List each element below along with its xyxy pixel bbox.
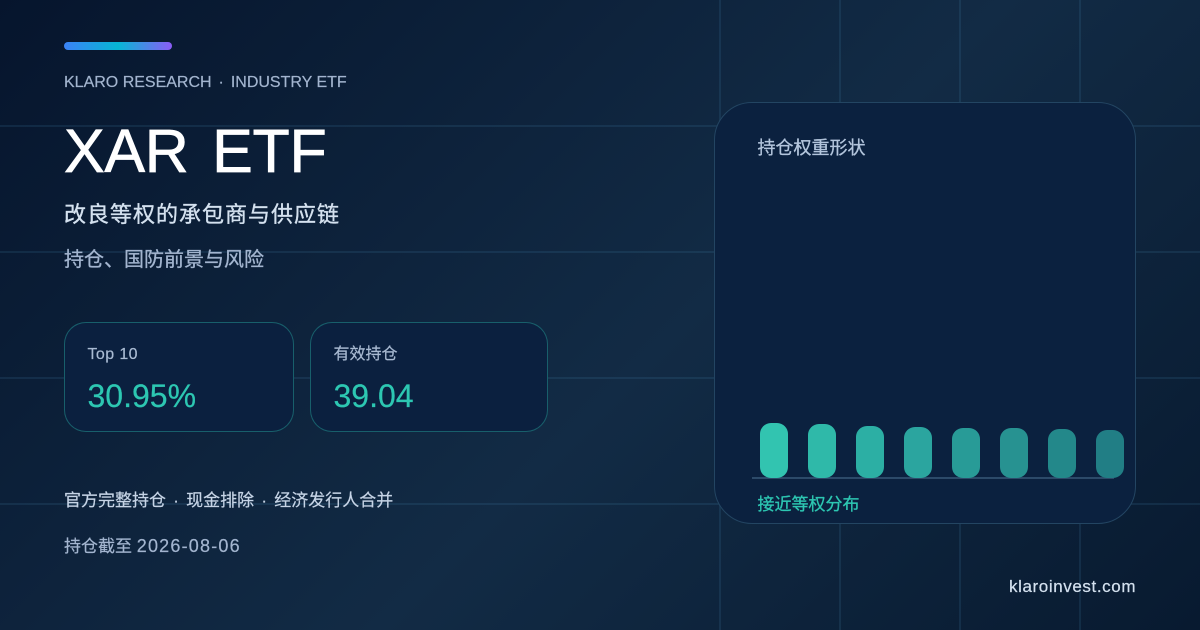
- stat card: effective holdings: [310, 322, 548, 432]
- title: XAR ETF: [64, 117, 326, 185]
- baseline: [752, 477, 1114, 479]
- chart caption: 接近等权分布: [758, 494, 860, 514]
- accent bar: [64, 42, 172, 50]
- bar chart: [752, 423, 1124, 479]
- subtitle: 改良等权的承包商与供应链: [64, 202, 340, 227]
- site url: klaroinvest.com: [1009, 577, 1136, 596]
- stat label: 有效持仓: [334, 346, 398, 363]
- panel: holdings weight shape: [714, 102, 1136, 524]
- stat label: Top 10: [88, 346, 138, 363]
- stat value: 39.04: [334, 378, 414, 414]
- as-of date: 持仓截至 2026-08-06: [64, 536, 241, 556]
- methodology note: 官方完整持仓 · 现金排除 · 经济发行人合并: [64, 491, 393, 510]
- eyebrow label: KLARO RESEARCH · INDUSTRY ETF: [64, 74, 347, 91]
- secondary subtitle: 持仓、国防前景与风险: [64, 249, 264, 271]
- stat card: Top 10: [64, 322, 294, 432]
- stat value: 30.95%: [88, 378, 196, 414]
- panel heading: 持仓权重形状: [758, 138, 866, 158]
